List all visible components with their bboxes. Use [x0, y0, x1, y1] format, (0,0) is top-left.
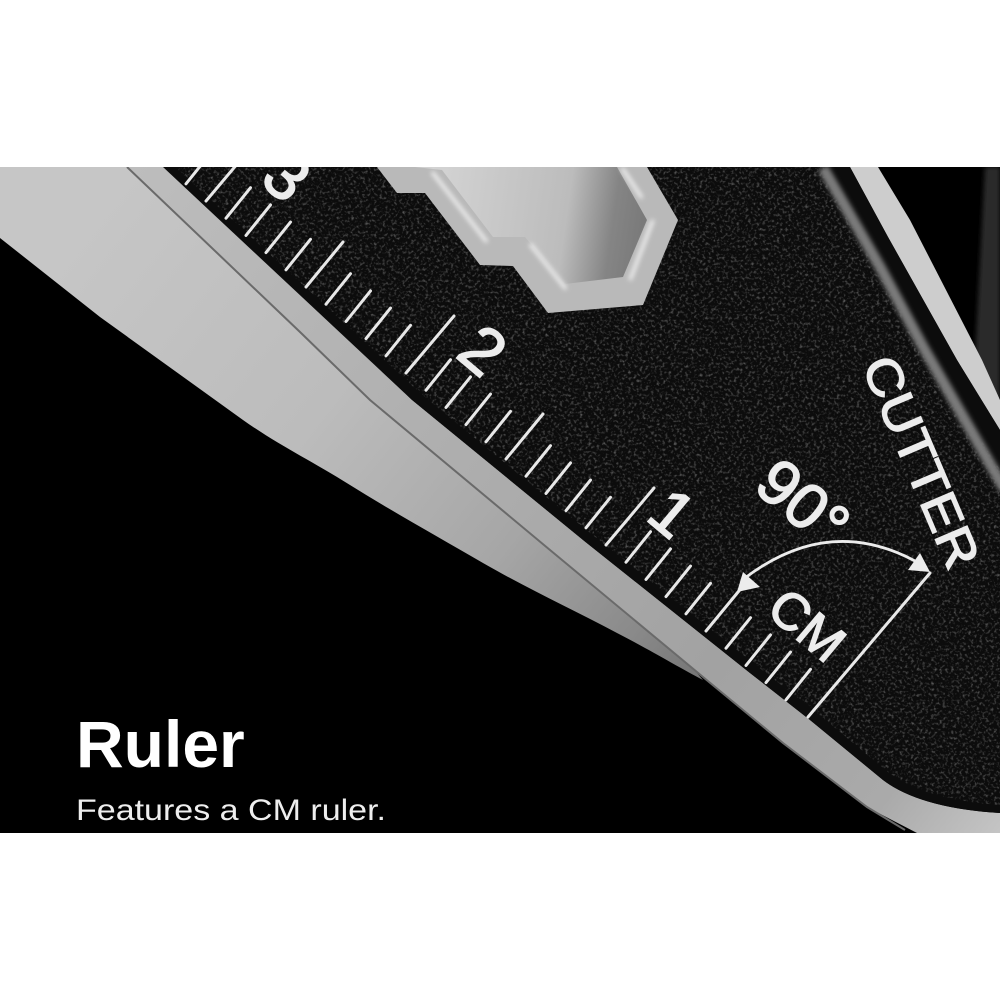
blade	[0, 167, 703, 680]
cut-out window interior	[415, 167, 647, 284]
ruler ticks	[186, 144, 930, 717]
window rim highlight	[432, 168, 653, 289]
number 3: 3	[249, 136, 325, 216]
photo background	[0, 167, 1000, 833]
bevel seam line	[127, 167, 905, 830]
short millimetre ticks	[186, 153, 810, 700]
photo panel: multi-tool ruler close-up	[0, 167, 1000, 833]
label: 90 degrees: 90°	[743, 444, 863, 562]
centimetre ticks	[206, 144, 654, 545]
label: CM: CM	[757, 578, 856, 674]
number 1: 1	[635, 474, 709, 552]
outer silver edge band	[850, 167, 1000, 430]
body bevel highlight	[823, 168, 1000, 490]
cut-out window rim	[377, 167, 678, 313]
caption: Features a CM ruler.	[76, 794, 386, 827]
zero line	[808, 573, 930, 717]
title: Ruler	[76, 707, 245, 781]
body texture	[175, 167, 1000, 805]
tool photograph	[0, 136, 1000, 833]
label: CUTTER: CUTTER	[851, 348, 991, 576]
blade bevel strip	[127, 167, 1000, 833]
half-centimetre ticks	[306, 242, 743, 631]
angle arc with arrowheads	[737, 541, 930, 592]
black tool body	[163, 167, 1000, 813]
number 2: 2	[445, 310, 521, 390]
neighbouring dark tool edge	[972, 167, 1000, 420]
